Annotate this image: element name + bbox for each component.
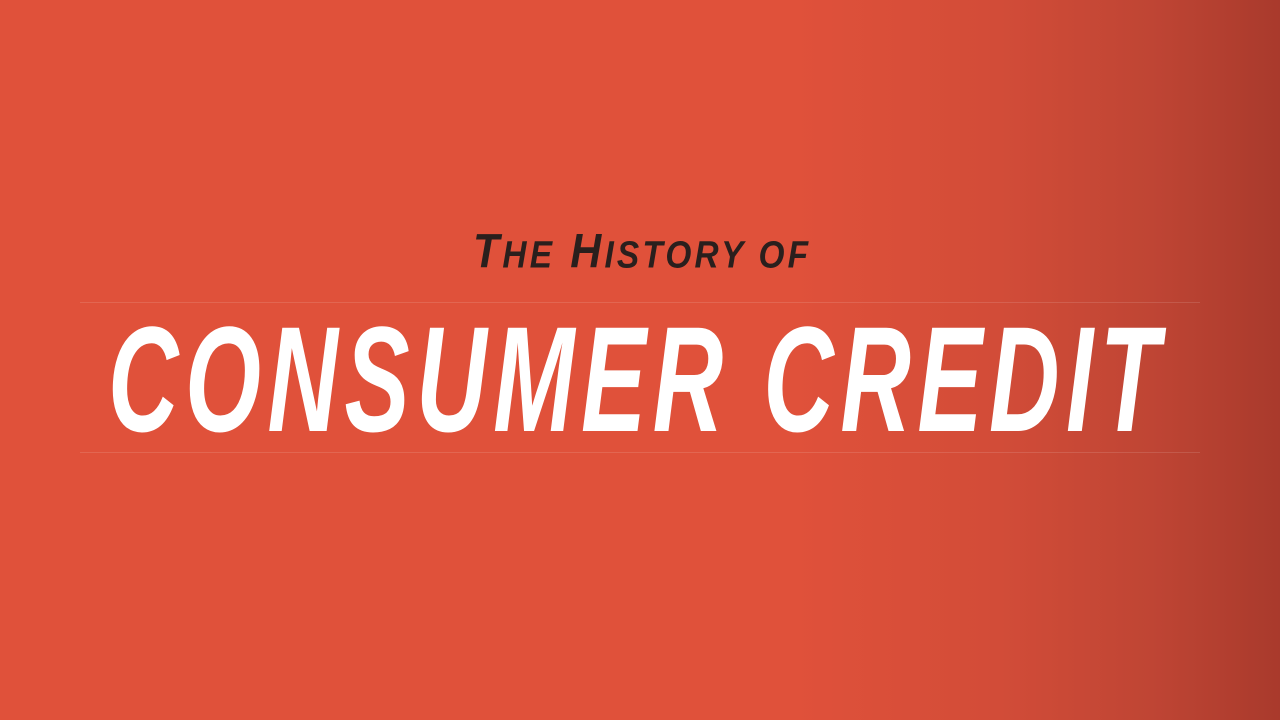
subtitle: The History of: THE HISTORY OF — [473, 224, 811, 278]
title: Consumer Credit: CONSUMER CREDIT — [108, 295, 1166, 463]
